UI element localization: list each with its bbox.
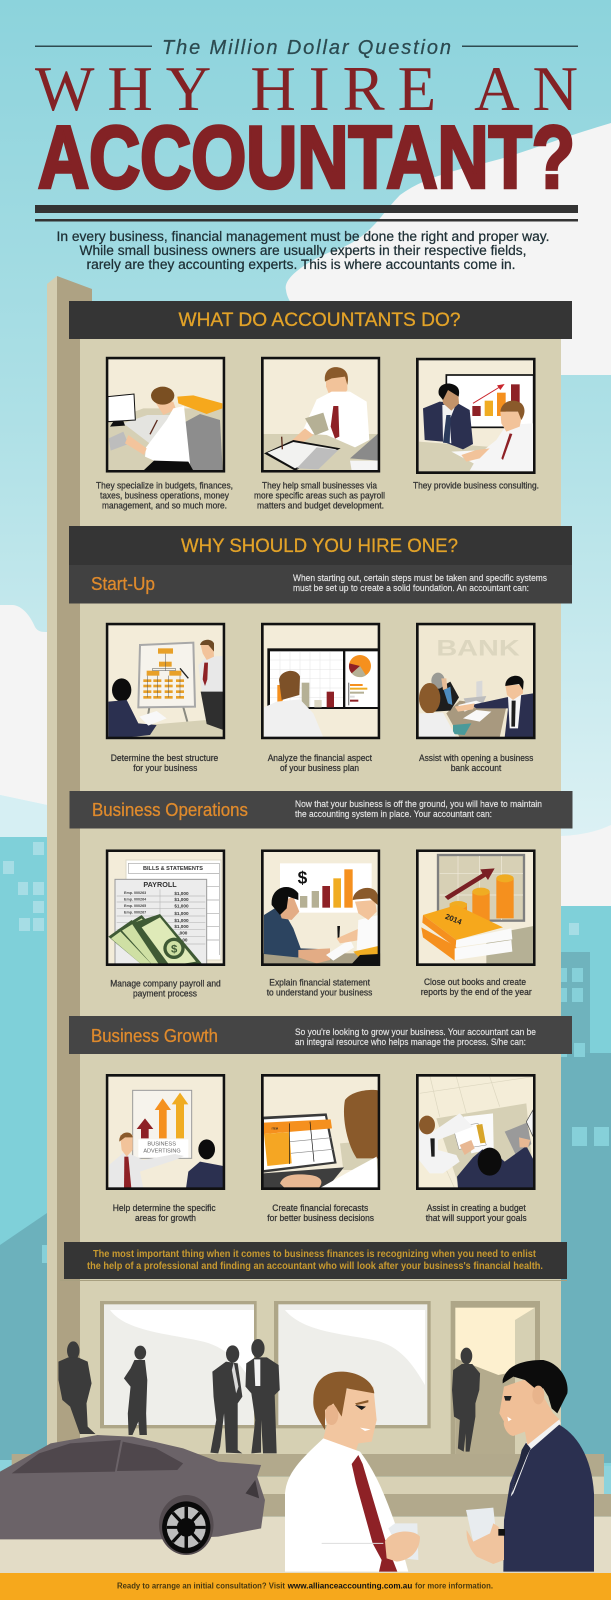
panel: closing books: 2014: [444, 912, 464, 927]
caption: areas for growth: [113, 1203, 216, 1223]
caption: small businesses: [254, 481, 385, 511]
band: start-up: [69, 565, 572, 604]
panel: payroll and money: ,000: [178, 931, 188, 936]
caption: financial aspect: Analyze the financial aspect: [268, 753, 372, 763]
caption: small businesses: matters and budget development.: [257, 501, 384, 511]
caption: financial statement: [267, 978, 373, 998]
window left: [100, 1301, 257, 1428]
man in navy suit: [466, 1360, 594, 1572]
panel: org chart presentation: [106, 622, 226, 740]
caption: financial forecasts: Create financial forecasts: [272, 1203, 369, 1213]
band: start-up: must be set up to create a solid foundation. An accountant can:: [293, 583, 529, 593]
band: why should you hire one: [69, 526, 572, 565]
caption: structure: Determine the best structure: [111, 753, 218, 763]
footer bar: for more information.: [415, 1580, 493, 1590]
subtitle: The Million Dollar Question: [162, 37, 451, 59]
entrance steps: [0, 1454, 611, 1573]
intro text: [56, 229, 550, 272]
panel: payroll and money: Emp. 000263: [124, 891, 146, 895]
caption: bank account: Assist with opening a business: [419, 753, 534, 763]
caption: small businesses: They help small businesses via: [262, 481, 377, 491]
caption: close books: reports by the end of the year: [421, 987, 532, 997]
panel: payroll and money: $1,000: [174, 891, 189, 896]
band: business operations: Business Operations: [92, 800, 248, 820]
caption: financial forecasts: for better business decisions: [267, 1213, 374, 1223]
caption: payroll: [110, 979, 221, 999]
header rule right: [462, 46, 578, 47]
panel: payroll and money: 00: [182, 938, 188, 943]
title line 1: WHY HIRE AN: [35, 54, 578, 124]
caption: bank account: bank account: [451, 763, 502, 773]
panel: overhead budget meeting: [416, 1074, 536, 1190]
panel: payroll and money: $: [171, 944, 178, 956]
panel: closing books: [416, 849, 536, 966]
panel: payroll and money: Emp. 000264: [124, 897, 147, 901]
panel: specialist at desk: [106, 356, 226, 473]
panel: laptop forecast: [261, 1074, 380, 1190]
caption: financial statement: Explain financial statement: [269, 978, 370, 988]
window middle: [274, 1301, 431, 1428]
caption: small businesses: more specific areas such as payroll: [254, 491, 385, 501]
caption: financial forecasts: [267, 1203, 374, 1223]
caption: specialize: [96, 480, 233, 510]
door: [451, 1301, 540, 1461]
panel: explaining financial statement: [261, 849, 380, 966]
caption: payroll: Manage company payroll and: [110, 979, 221, 989]
panel: business advertising growth: ADVERTISING: [143, 1149, 181, 1155]
panel: payroll and money: BILLS & STATEMENTS: [143, 866, 204, 872]
caption: specialize: taxes, business operations, money: [100, 490, 229, 500]
panel: business consulting: [416, 358, 536, 474]
panel: analyzing business plan charts: [261, 622, 380, 740]
caption: financial aspect: of your business plan: [280, 763, 359, 773]
panel: payroll and money: [106, 849, 226, 966]
footer bar: www.allianceaccounting.com.au: [287, 1580, 412, 1590]
header thick bar: [35, 205, 578, 213]
panel: payroll and money: PAYROLL: [143, 882, 177, 889]
panel: payroll and money: Emp. 000267: [124, 911, 146, 915]
man in white shirt: [285, 1372, 420, 1572]
band: what do accountants do: [69, 301, 572, 339]
building: [47, 276, 567, 1461]
header thin bar: [35, 219, 578, 222]
panel: payroll and money: $1,000: [174, 924, 189, 929]
panel: business advertising growth: BUSINESS: [147, 1142, 177, 1148]
panel: laptop forecast: ITEM: [272, 1126, 279, 1130]
band: why should you hire one: WHY SHOULD YOU HIRE ONE?: [181, 536, 458, 557]
caption: creating a budget: Assist in creating a budget: [427, 1203, 526, 1213]
caption: specialize: They specialize in budgets, finances,: [96, 480, 233, 490]
panel: man with dollar book: [261, 356, 380, 473]
intro text: rarely are they accounting experts. This is where accountants come in.: [86, 257, 516, 272]
band: business operations: the accounting system in place. Your accountant can:: [295, 809, 492, 819]
caption: structure: for your business: [133, 763, 198, 773]
caption: bank account: [419, 753, 534, 773]
caption: creating a budget: that will support your goals: [426, 1213, 527, 1223]
panel: explaining financial statement: $: [298, 867, 308, 887]
caption: specialize: management, and so much more.: [102, 500, 227, 510]
caption: payroll: payment process: [133, 989, 197, 999]
band: business growth: [69, 1016, 572, 1054]
caption: close books: Close out books and create: [424, 977, 526, 987]
caption: close books: [421, 977, 532, 997]
panel: payroll and money: $1,000: [174, 904, 189, 909]
band: business operations: Now that your business is off the ground, you will have to maintain: [295, 799, 542, 809]
panel: payroll and money: Emp. 000265: [124, 904, 146, 908]
caption: areas for growth: Help determine the specific: [113, 1203, 216, 1213]
header rule left: [35, 46, 152, 47]
caption: structure: [111, 753, 218, 773]
intro text: While small business owners are usually experts in their respective fields,: [80, 243, 526, 258]
footer bar: Ready to arrange an initial consultation? Visit: [117, 1580, 285, 1590]
panel: business advertising growth: [106, 1074, 226, 1190]
caption: areas for growth: areas for growth: [135, 1213, 196, 1223]
silhouette people: [58, 1339, 480, 1453]
caption: creating a budget: [426, 1203, 527, 1223]
caption: financial aspect: [268, 753, 372, 773]
panel: payroll and money: $1,000: [174, 918, 189, 923]
band: business growth: an integral resource who helps manage the process. S/he can:: [295, 1037, 526, 1047]
caption: financial statement: to understand your business: [267, 988, 373, 998]
band: business growth: So you're looking to grow your business. Your accountant can be: [295, 1027, 536, 1037]
intro text: In every business, financial management must be done the right and proper way.: [56, 229, 550, 244]
panel: payroll and money: $1,000: [174, 911, 189, 916]
panel: opening bank account: [416, 622, 536, 740]
band: closing statement: [64, 1242, 567, 1279]
panel: payroll and money: $1,000: [174, 897, 189, 902]
band: start-up: Start-Up: [91, 574, 155, 594]
band: closing statement: the help of a professional and finding an accountant who will look after your business's financial health.: [87, 1261, 543, 1272]
car: [0, 1435, 265, 1555]
street scene: [0, 1339, 611, 1573]
band: start-up: When starting out, certain steps must be taken and specific systems: [293, 573, 548, 583]
band: business operations: [70, 791, 572, 828]
band: what do accountants do: WHAT DO ACCOUNTANTS DO?: [178, 310, 460, 331]
storefront windows and door: [100, 1301, 540, 1461]
caption: consulting: They provide business consulting.: [413, 481, 539, 491]
band: closing statement: The most important thing when it comes to business finances is recognizing when you need to enlist: [93, 1249, 537, 1260]
band: business growth: Business Growth: [91, 1026, 218, 1046]
panel: opening bank account: BANK: [436, 636, 520, 661]
footer bar: [0, 1573, 611, 1600]
